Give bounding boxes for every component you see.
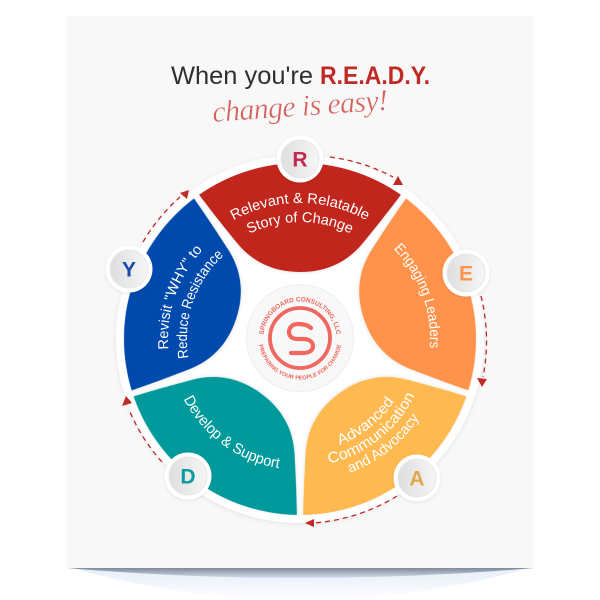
badge A: A	[409, 468, 425, 490]
arrow: E to A	[477, 296, 487, 387]
segment: R Relevant & Relatable	[199, 164, 401, 274]
badge R	[276, 136, 324, 182]
segment: Y Revisit WHY: Revisit "WHY" to	[158, 246, 201, 349]
title: R.E.A.D.Y.	[320, 62, 430, 90]
arrow: D to Y	[122, 396, 162, 462]
center logo: SPRINGBOARD CONSULTING, LLC	[259, 296, 341, 334]
badge Y: Y	[122, 258, 136, 282]
arrow: R to E	[330, 157, 403, 185]
poster card	[67, 16, 534, 568]
segment: D Develop & Support	[134, 376, 298, 516]
segment: A Advanced Communication	[302, 376, 466, 516]
segment: Y Revisit WHY: Reduce Resistance	[176, 252, 222, 358]
segment: A Advanced Communication: Advanced	[340, 396, 394, 445]
center logo: PREPARING YOUR PEOPLE FOR CHANGE	[259, 344, 341, 380]
segment: D Develop & Support: Develop & Support	[184, 395, 280, 468]
title: When you're	[171, 62, 313, 90]
segment: E Engaging Leaders: Engaging Leaders	[394, 242, 440, 348]
subtitle script: change is easy!	[211, 84, 389, 129]
badge D	[164, 452, 212, 500]
badge Y	[106, 246, 152, 292]
badge A	[394, 454, 440, 502]
arrow: A to D	[305, 496, 397, 527]
badge R: R	[292, 148, 308, 172]
badge E: E	[459, 262, 473, 286]
segment: R Relevant & Relatable: Story of Change	[247, 212, 352, 232]
segment: E Engaging Leaders	[358, 198, 476, 390]
poster shadow	[67, 568, 534, 600]
segment: A Advanced Communication: Communication	[328, 393, 414, 462]
wheel background disc	[116, 155, 484, 523]
segment: Y Revisit WHY	[124, 198, 242, 391]
center logo	[246, 284, 354, 392]
badge D: D	[180, 466, 196, 488]
badge E	[442, 250, 490, 296]
segment: A Advanced Communication: and Advocacy	[348, 414, 419, 472]
title	[171, 62, 430, 90]
segment: R Relevant & Relatable: Relevant & Relatable	[230, 192, 368, 220]
arrow: Y to R	[143, 190, 189, 242]
